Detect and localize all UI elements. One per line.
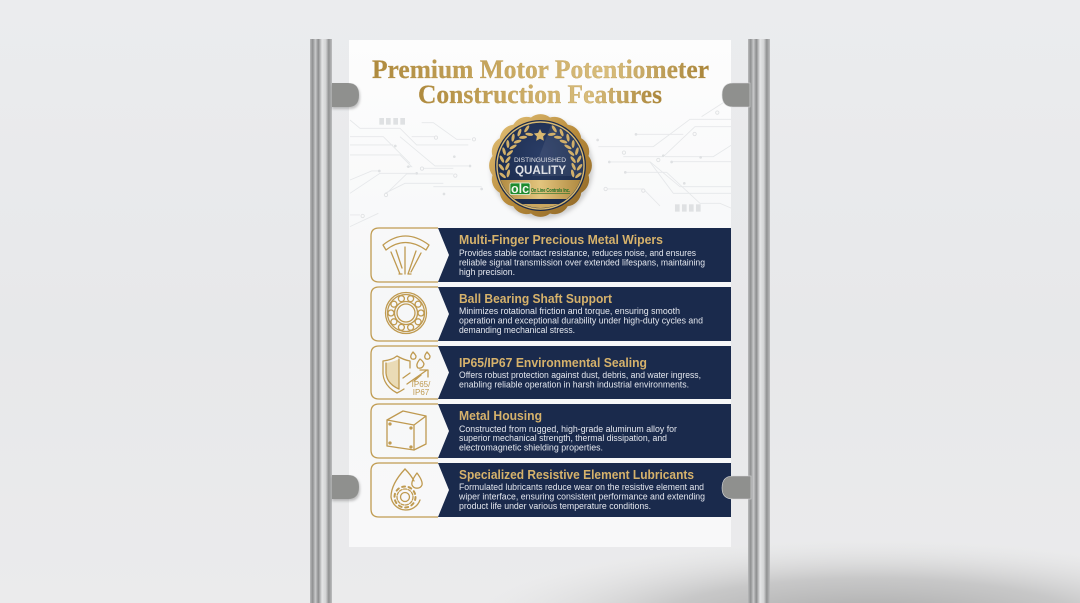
row 5: lubricants [371,463,731,517]
title [372,55,709,109]
text: sealing: enabling reliable operation in harsh industrial environments. [459,380,689,390]
text: bearing [459,292,703,335]
icon: shield with drops: IP65/ [412,380,431,389]
text: housing [459,409,677,452]
clamp: top left [332,83,360,109]
text: lubricants: wiper interface, ensuring consistent performance and extending [458,492,705,502]
clamp: bottom right [722,476,751,499]
text: bearing: Ball Bearing Shaft Support [459,292,613,306]
text: housing: superior mechanical strength, thermal dissipation, and [459,433,667,443]
row 2: ball bearing [371,287,731,341]
text: housing: Constructed from rugged, high-grade aluminum alloy for [459,424,677,434]
seal wording: DISTINGUISHED [514,157,566,164]
text: wipers: Multi-Finger Precious Metal Wipers [459,233,663,247]
clamp: bottom left [332,475,360,501]
title: Premium Motor Potentiometer [372,55,709,84]
left post [310,39,332,603]
text: lubricants [458,468,705,511]
text: lubricants: Specialized Resistive Element Lubricants [459,468,694,482]
company logo: On Line Controls Inc. [531,188,570,194]
text: bearing: Minimizes rotational friction and torque, ensuring smooth [459,306,680,316]
title: Construction Features [418,80,662,109]
gold ribbon band [500,180,580,208]
text: bearing: operation and exceptional durability under high-duty cycles and [459,316,703,326]
text: wipers: Provides stable contact resistance, reduces noise, and ensures [459,248,696,258]
icon: oil drop with gear [391,469,422,510]
text: sealing: IP65/IP67 Environmental Sealing [459,356,647,370]
text: wipers: high precision. [459,267,515,277]
icon: shield with drops: IP67 [413,388,430,397]
text: wipers [459,233,705,277]
text: lubricants: Formulated lubricants reduce wear on the resistive element and [459,482,704,492]
clamp: top right [722,83,750,107]
panel: sign [349,40,732,547]
icon: metal box [387,411,426,450]
circuit board pattern [350,98,732,227]
right post [748,39,770,603]
star [534,129,546,141]
row 3: environmental sealing [371,346,731,399]
text: bearing: demanding mechanical stress. [459,325,575,335]
company logo [510,181,570,196]
badge: distinguished quality seal [489,114,593,219]
text: wipers: reliable signal transmission over extended lifespans, maintaining [459,258,705,268]
row 4: metal housing [371,404,731,458]
text: lubricants: product life under various temperature conditions. [459,501,651,511]
icon: bearing [386,292,426,334]
seal wording [514,157,566,177]
icon: wiper [383,236,429,274]
laurel wreath [498,124,583,180]
seal wording: QUALITY [515,165,566,177]
icon: shield with drops [383,352,431,397]
row 1: multi-finger wipers [371,228,731,282]
text: sealing: Offers robust protection against dust, debris, and water ingress, [459,370,701,380]
text: sealing [459,356,701,390]
text: housing: Metal Housing [459,409,542,423]
company logo: olc [511,181,529,196]
text: housing: electromagnetic shielding properties. [459,442,603,452]
